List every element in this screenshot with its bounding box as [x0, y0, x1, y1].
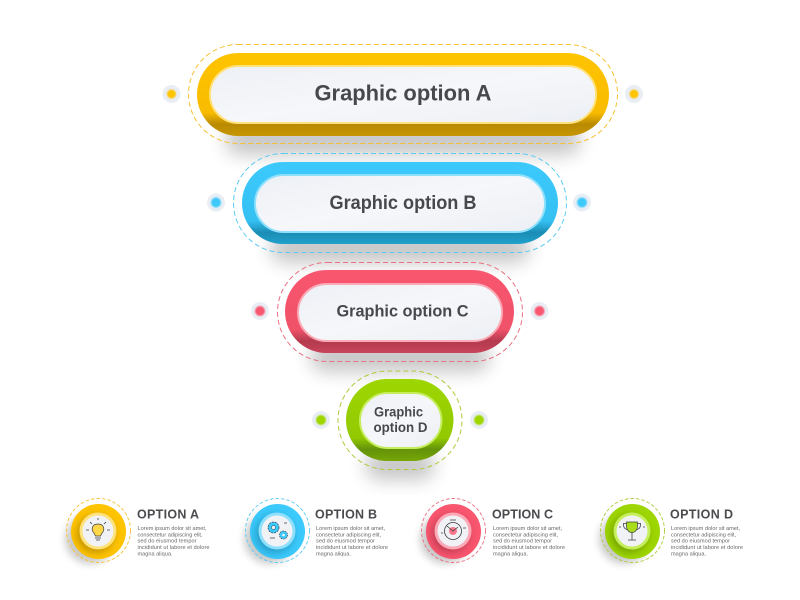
heading: option A: Graphic option A	[314, 80, 492, 106]
text: option A description: sed do eiusmod tempor	[138, 538, 197, 544]
text: option D description: Lorem ipsum dolor sit amet,	[671, 526, 740, 532]
text: option A description: magna aliqua.	[138, 551, 173, 557]
text: option B description: magna aliqua.	[316, 551, 351, 557]
text: option A description: incididunt ut labore et dolore	[138, 545, 210, 551]
text: option B description: sed do eiusmod tempor	[316, 538, 375, 544]
icon: option C right dot	[530, 302, 548, 320]
text: option B description	[316, 526, 388, 557]
icon: option B right dot	[573, 194, 591, 212]
text: option A description: Lorem ipsum dolor sit amet,	[138, 526, 207, 532]
text: option C description	[493, 526, 565, 557]
icon: option C badge with clock	[420, 498, 486, 564]
panel: legend option D	[599, 498, 743, 564]
heading: option D: option D	[374, 419, 428, 435]
heading: OPTION A: OPTION A	[137, 508, 199, 522]
panel: option D pill	[338, 371, 462, 480]
icon: option D badge with trophy	[599, 498, 664, 564]
icon: option B left dot	[207, 194, 225, 212]
heading: option C: Graphic option C	[336, 302, 468, 320]
text: option B description: incididunt ut labore et dolore	[316, 545, 388, 551]
panel: option B pill	[234, 154, 566, 263]
text: option C description: consectetur adipiscing elit,	[493, 532, 558, 538]
text: option C description: Lorem ipsum dolor sit amet,	[493, 526, 562, 532]
heading: OPTION C: OPTION C	[492, 508, 553, 522]
panel: legend option B	[244, 498, 388, 564]
icon: option B badge with gears	[244, 498, 310, 564]
heading: OPTION B: OPTION B	[315, 508, 377, 522]
text: option A description	[138, 526, 210, 557]
text: option C description: sed do eiusmod tempor	[493, 538, 552, 544]
heading: option D: Graphic	[374, 404, 423, 420]
text: option B description: Lorem ipsum dolor sit amet,	[316, 526, 385, 532]
heading: option B: Graphic option B	[330, 193, 476, 214]
icon: option D right dot	[470, 411, 488, 429]
icon: option C left dot	[251, 302, 269, 320]
text: option D description: incididunt ut labore et dolore	[671, 545, 743, 551]
text: option D description: magna aliqua.	[671, 551, 706, 557]
text: option D description: sed do eiusmod tempor	[671, 538, 730, 544]
text: option B description: consectetur adipiscing elit,	[316, 532, 381, 538]
text: option C description: magna aliqua.	[493, 551, 528, 557]
text: option D description: consectetur adipiscing elit,	[671, 532, 736, 538]
panel: legend option A	[65, 498, 210, 564]
icon: option A badge with light bulb	[65, 498, 130, 564]
icon: option A left dot	[162, 85, 180, 103]
heading: OPTION D: OPTION D	[670, 508, 733, 522]
panel: legend option C	[420, 498, 565, 564]
text: option C description: incididunt ut labore et dolore	[493, 545, 565, 551]
icon: option A right dot	[625, 85, 643, 103]
icon: option D left dot	[312, 411, 330, 429]
panel: option A pill	[188, 44, 618, 155]
text: option A description: consectetur adipiscing elit,	[138, 532, 203, 538]
panel: option C pill	[278, 262, 522, 372]
text: option D description	[671, 526, 743, 557]
